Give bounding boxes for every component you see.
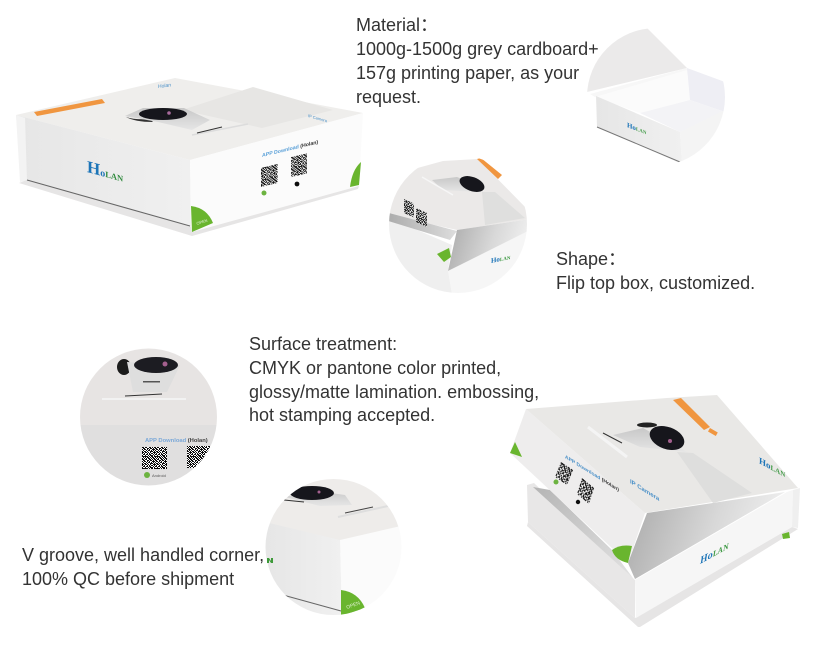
open text: OPEN xyxy=(346,600,361,611)
lid top xyxy=(385,159,530,230)
camera body xyxy=(613,428,687,452)
text: surface treatment: Surface treatment: xyxy=(249,334,397,354)
app download caption: APP Download (Holan) xyxy=(565,454,619,493)
app download caption: APP Download (Holan) xyxy=(145,438,208,444)
stand line xyxy=(338,506,388,517)
lid top xyxy=(526,395,798,513)
green open tag xyxy=(341,590,365,616)
photo: half open box xyxy=(510,395,800,627)
box interior back xyxy=(595,70,690,113)
text: material: 1000g-1500g grey cardboard+ xyxy=(356,39,599,59)
right face xyxy=(340,525,405,620)
text: material: 157g printing paper, as your xyxy=(356,63,579,83)
camera lens xyxy=(139,108,187,120)
front face xyxy=(596,96,682,164)
lid grey wedge xyxy=(677,452,752,503)
camera shadow xyxy=(117,359,131,375)
android icon xyxy=(554,480,558,484)
right outer face xyxy=(680,113,723,160)
lid logo: HoLAN xyxy=(759,456,786,481)
camera body xyxy=(432,177,468,190)
text: material: Material： xyxy=(356,15,438,35)
QR code one xyxy=(404,199,414,218)
lower surface xyxy=(78,425,220,487)
base front face xyxy=(635,490,793,618)
lid flap xyxy=(510,409,645,563)
orange title strip xyxy=(34,99,105,116)
logo: HoLAN xyxy=(627,121,647,136)
green open text: OPEN xyxy=(196,218,208,226)
green corner flap xyxy=(612,546,632,563)
box top grey wedge xyxy=(182,87,333,128)
camera lens xyxy=(460,176,484,192)
QR code apple xyxy=(187,446,213,468)
upper surface xyxy=(78,347,220,425)
stand line xyxy=(102,398,186,400)
apple icon xyxy=(576,500,580,504)
lower left face xyxy=(389,222,452,292)
circle: flip lid detail xyxy=(385,158,530,300)
camera lens xyxy=(134,357,178,373)
under lid shadow xyxy=(448,219,530,271)
lens glint xyxy=(318,490,320,494)
circle: open box interior xyxy=(585,26,725,164)
QR code one xyxy=(555,462,573,485)
stand dark line xyxy=(345,507,373,513)
circle: corner detail xyxy=(264,478,405,620)
green corner lid left xyxy=(510,442,522,457)
left face xyxy=(265,522,342,616)
camera lens xyxy=(290,486,334,500)
interior floor xyxy=(640,100,725,132)
camera stand line xyxy=(422,177,453,195)
camera stand dark line xyxy=(197,127,222,133)
photo: closed box xyxy=(16,78,363,236)
grey band xyxy=(385,212,457,240)
stand dark line xyxy=(125,394,162,396)
green corner right xyxy=(350,162,361,187)
QR code android xyxy=(142,447,167,469)
camera body xyxy=(125,108,210,130)
logo: HoLAN xyxy=(491,253,511,265)
box base edge xyxy=(19,180,359,236)
camera body xyxy=(285,490,352,506)
IP camera label: IP Camera xyxy=(630,478,660,503)
android label: Android xyxy=(152,473,166,478)
orange sub mark xyxy=(708,428,718,436)
box left face xyxy=(16,115,191,228)
camera lens xyxy=(646,422,688,454)
top surface xyxy=(264,478,404,553)
lens glint xyxy=(162,362,168,366)
stand line xyxy=(588,427,627,457)
back hinge strip xyxy=(590,68,693,97)
green mark beside comma xyxy=(267,558,273,563)
stand dark line xyxy=(603,433,622,443)
box dark seam xyxy=(27,180,190,226)
orange title xyxy=(477,158,502,179)
base logo: HoLAN xyxy=(699,539,730,567)
QR code two xyxy=(577,478,594,504)
text: shape: Flip top box, customized. xyxy=(556,273,755,293)
app download caption: APP Download (Holan) xyxy=(262,140,318,159)
QR code apple xyxy=(291,153,307,177)
box right face xyxy=(190,113,363,232)
camera body xyxy=(127,362,180,392)
dark seam xyxy=(283,595,341,611)
text: surface treatment: glossy/matte lamination. embossing, xyxy=(249,382,539,402)
circle: print detail xyxy=(78,347,220,487)
top logo text: Holan xyxy=(158,82,171,90)
camera cap xyxy=(637,422,657,428)
text: surface treatment: CMYK or pantone color printed, xyxy=(249,358,501,378)
text: shape: Shape： xyxy=(556,249,626,269)
text: v groove: 100% QC before shipment xyxy=(22,569,234,589)
QR code two xyxy=(416,208,427,227)
green corner open tag xyxy=(191,206,213,232)
base seam xyxy=(597,127,680,162)
interior right wall xyxy=(687,68,725,112)
box spine xyxy=(16,115,27,182)
green small tag xyxy=(782,532,790,539)
lid xyxy=(585,26,687,92)
orange title xyxy=(673,398,710,430)
under lid shadow xyxy=(628,492,785,579)
lens glint xyxy=(167,111,171,115)
android icon xyxy=(144,472,150,478)
apple icon xyxy=(295,182,299,186)
text: v groove: V groove, well handled corner, xyxy=(22,545,264,565)
top camera label: IP Camera xyxy=(308,113,328,123)
box top xyxy=(16,78,363,160)
text: material: request. xyxy=(356,87,421,107)
camera stand line xyxy=(192,124,248,135)
base interior shadow xyxy=(533,487,633,578)
camera crescent xyxy=(126,117,153,122)
base lip xyxy=(527,522,798,627)
QR code android xyxy=(261,164,278,187)
camera label xyxy=(143,381,160,382)
logo: Holan on left face: HoLAN xyxy=(87,157,124,186)
lid grey wedge xyxy=(482,192,525,225)
text: surface treatment: hot stamping accepted. xyxy=(249,405,435,425)
base spine xyxy=(792,488,800,528)
lens glint xyxy=(668,439,672,443)
base front xyxy=(448,232,526,293)
camera crescent xyxy=(284,500,304,502)
android icon xyxy=(262,190,266,196)
base left outer face xyxy=(527,483,635,618)
green tag xyxy=(437,248,451,262)
